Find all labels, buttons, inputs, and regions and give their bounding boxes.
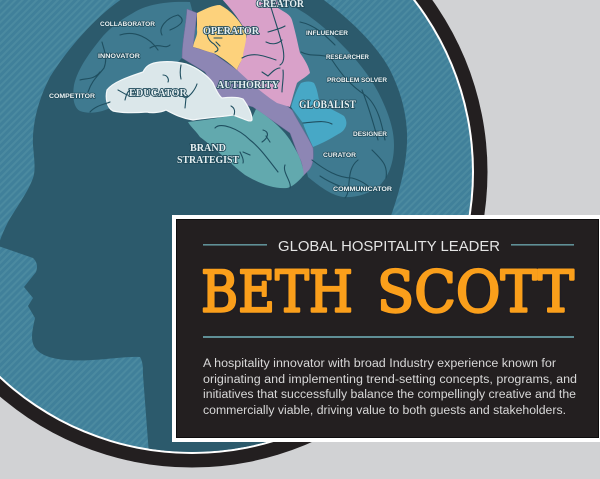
brain: frontal lobe — [73, 2, 200, 113]
brain labels — [49, 0, 393, 193]
label: brand strategist — [177, 142, 240, 166]
label: globalist: GLOBALIST — [299, 99, 356, 111]
subtitle: GLOBAL HOSPITALITY LEADER — [278, 238, 500, 255]
label: educator: EDUCATOR — [129, 87, 188, 99]
label: collaborator: COLLABORATOR — [100, 22, 156, 28]
brain: white educator region — [106, 62, 252, 121]
brain folds — [80, 4, 386, 198]
subtitle rules — [203, 244, 574, 246]
description: originating and implementing trend-setting concepts, programs, and — [203, 374, 577, 386]
circle frame — [0, 0, 488, 468]
brain: teal strategist region — [188, 109, 304, 188]
brain — [73, 0, 394, 198]
label: curator: CURATOR — [323, 153, 357, 159]
brain: yellow operator region — [193, 5, 246, 70]
label: brand strategist: BRAND — [190, 142, 226, 154]
label: designer: DESIGNER — [353, 132, 388, 138]
label: brand strategist: STRATEGIST — [177, 154, 240, 166]
label: innovator: INNOVATOR — [98, 54, 141, 60]
brain: pink creator region — [221, 0, 310, 107]
description: commercially viable, driving value to both guests and stakeholders. — [203, 405, 566, 417]
head silhouette — [0, 0, 407, 455]
description: A hospitality innovator with broad Industry experience known for — [203, 358, 556, 370]
label: competitor: COMPETITOR — [49, 94, 96, 100]
description — [203, 358, 577, 417]
description: initiatives that successfully balance the compellingly creative and the — [203, 389, 576, 401]
label: problem solver: PROBLEM SOLVER — [327, 78, 388, 84]
name heading — [201, 260, 574, 326]
name heading: SCOTT — [377, 260, 574, 326]
brain: blue globalist region — [291, 82, 346, 147]
brain: right lobe — [276, 0, 394, 197]
brain: purple authority region — [182, 9, 313, 176]
name heading: BETH — [201, 260, 353, 326]
label: operator: OPERATOR — [203, 25, 260, 37]
panel: name card — [172, 215, 600, 442]
label: communicator: COMMUNICATOR — [333, 187, 393, 193]
label: influencer: INFLUENCER — [306, 31, 349, 37]
divider — [203, 336, 574, 338]
label: authority: AUTHORITY — [217, 79, 279, 91]
label: researcher: RESEARCHER — [326, 55, 370, 61]
